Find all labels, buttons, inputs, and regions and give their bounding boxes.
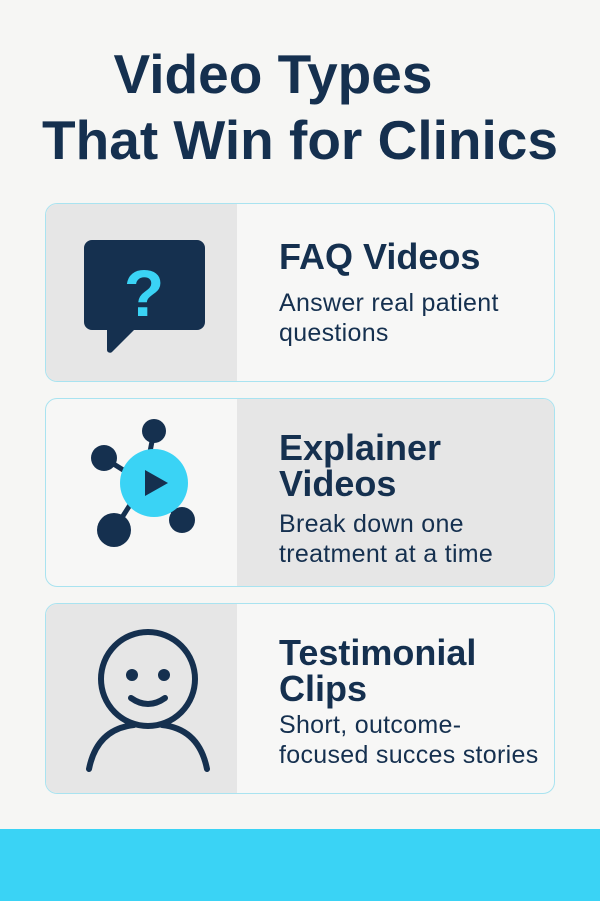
heading: Explainer: [279, 427, 441, 468]
text: Answer real patient: [279, 289, 499, 317]
text: [279, 711, 538, 769]
title: Video Types: [114, 43, 432, 105]
heading: FAQ Videos: [279, 236, 480, 277]
panel: FAQ videos: [45, 203, 555, 382]
text: questions: [279, 319, 389, 347]
heading: Clips: [279, 668, 367, 709]
icon: question speech bubble: ?: [124, 256, 164, 330]
text: Break down one: [279, 510, 464, 538]
text: [279, 510, 493, 568]
heading: Testimonial: [279, 632, 476, 673]
panel: explainer videos: [45, 398, 555, 587]
panel: testimonial clips: [45, 603, 555, 794]
text: treatment at a time: [279, 540, 493, 568]
icon: question speech bubble: [84, 240, 205, 353]
footer bar: [0, 829, 600, 901]
heading: [279, 632, 476, 709]
icon: play network: [91, 419, 195, 547]
title: That Win for Clinics: [42, 109, 558, 171]
text: Short, outcome-: [279, 711, 461, 739]
text: [279, 289, 499, 347]
icon: smiley person: [86, 629, 210, 772]
title: [42, 43, 558, 171]
text: focused succes stories: [279, 741, 538, 769]
heading: [279, 427, 441, 504]
heading: Videos: [279, 463, 396, 504]
